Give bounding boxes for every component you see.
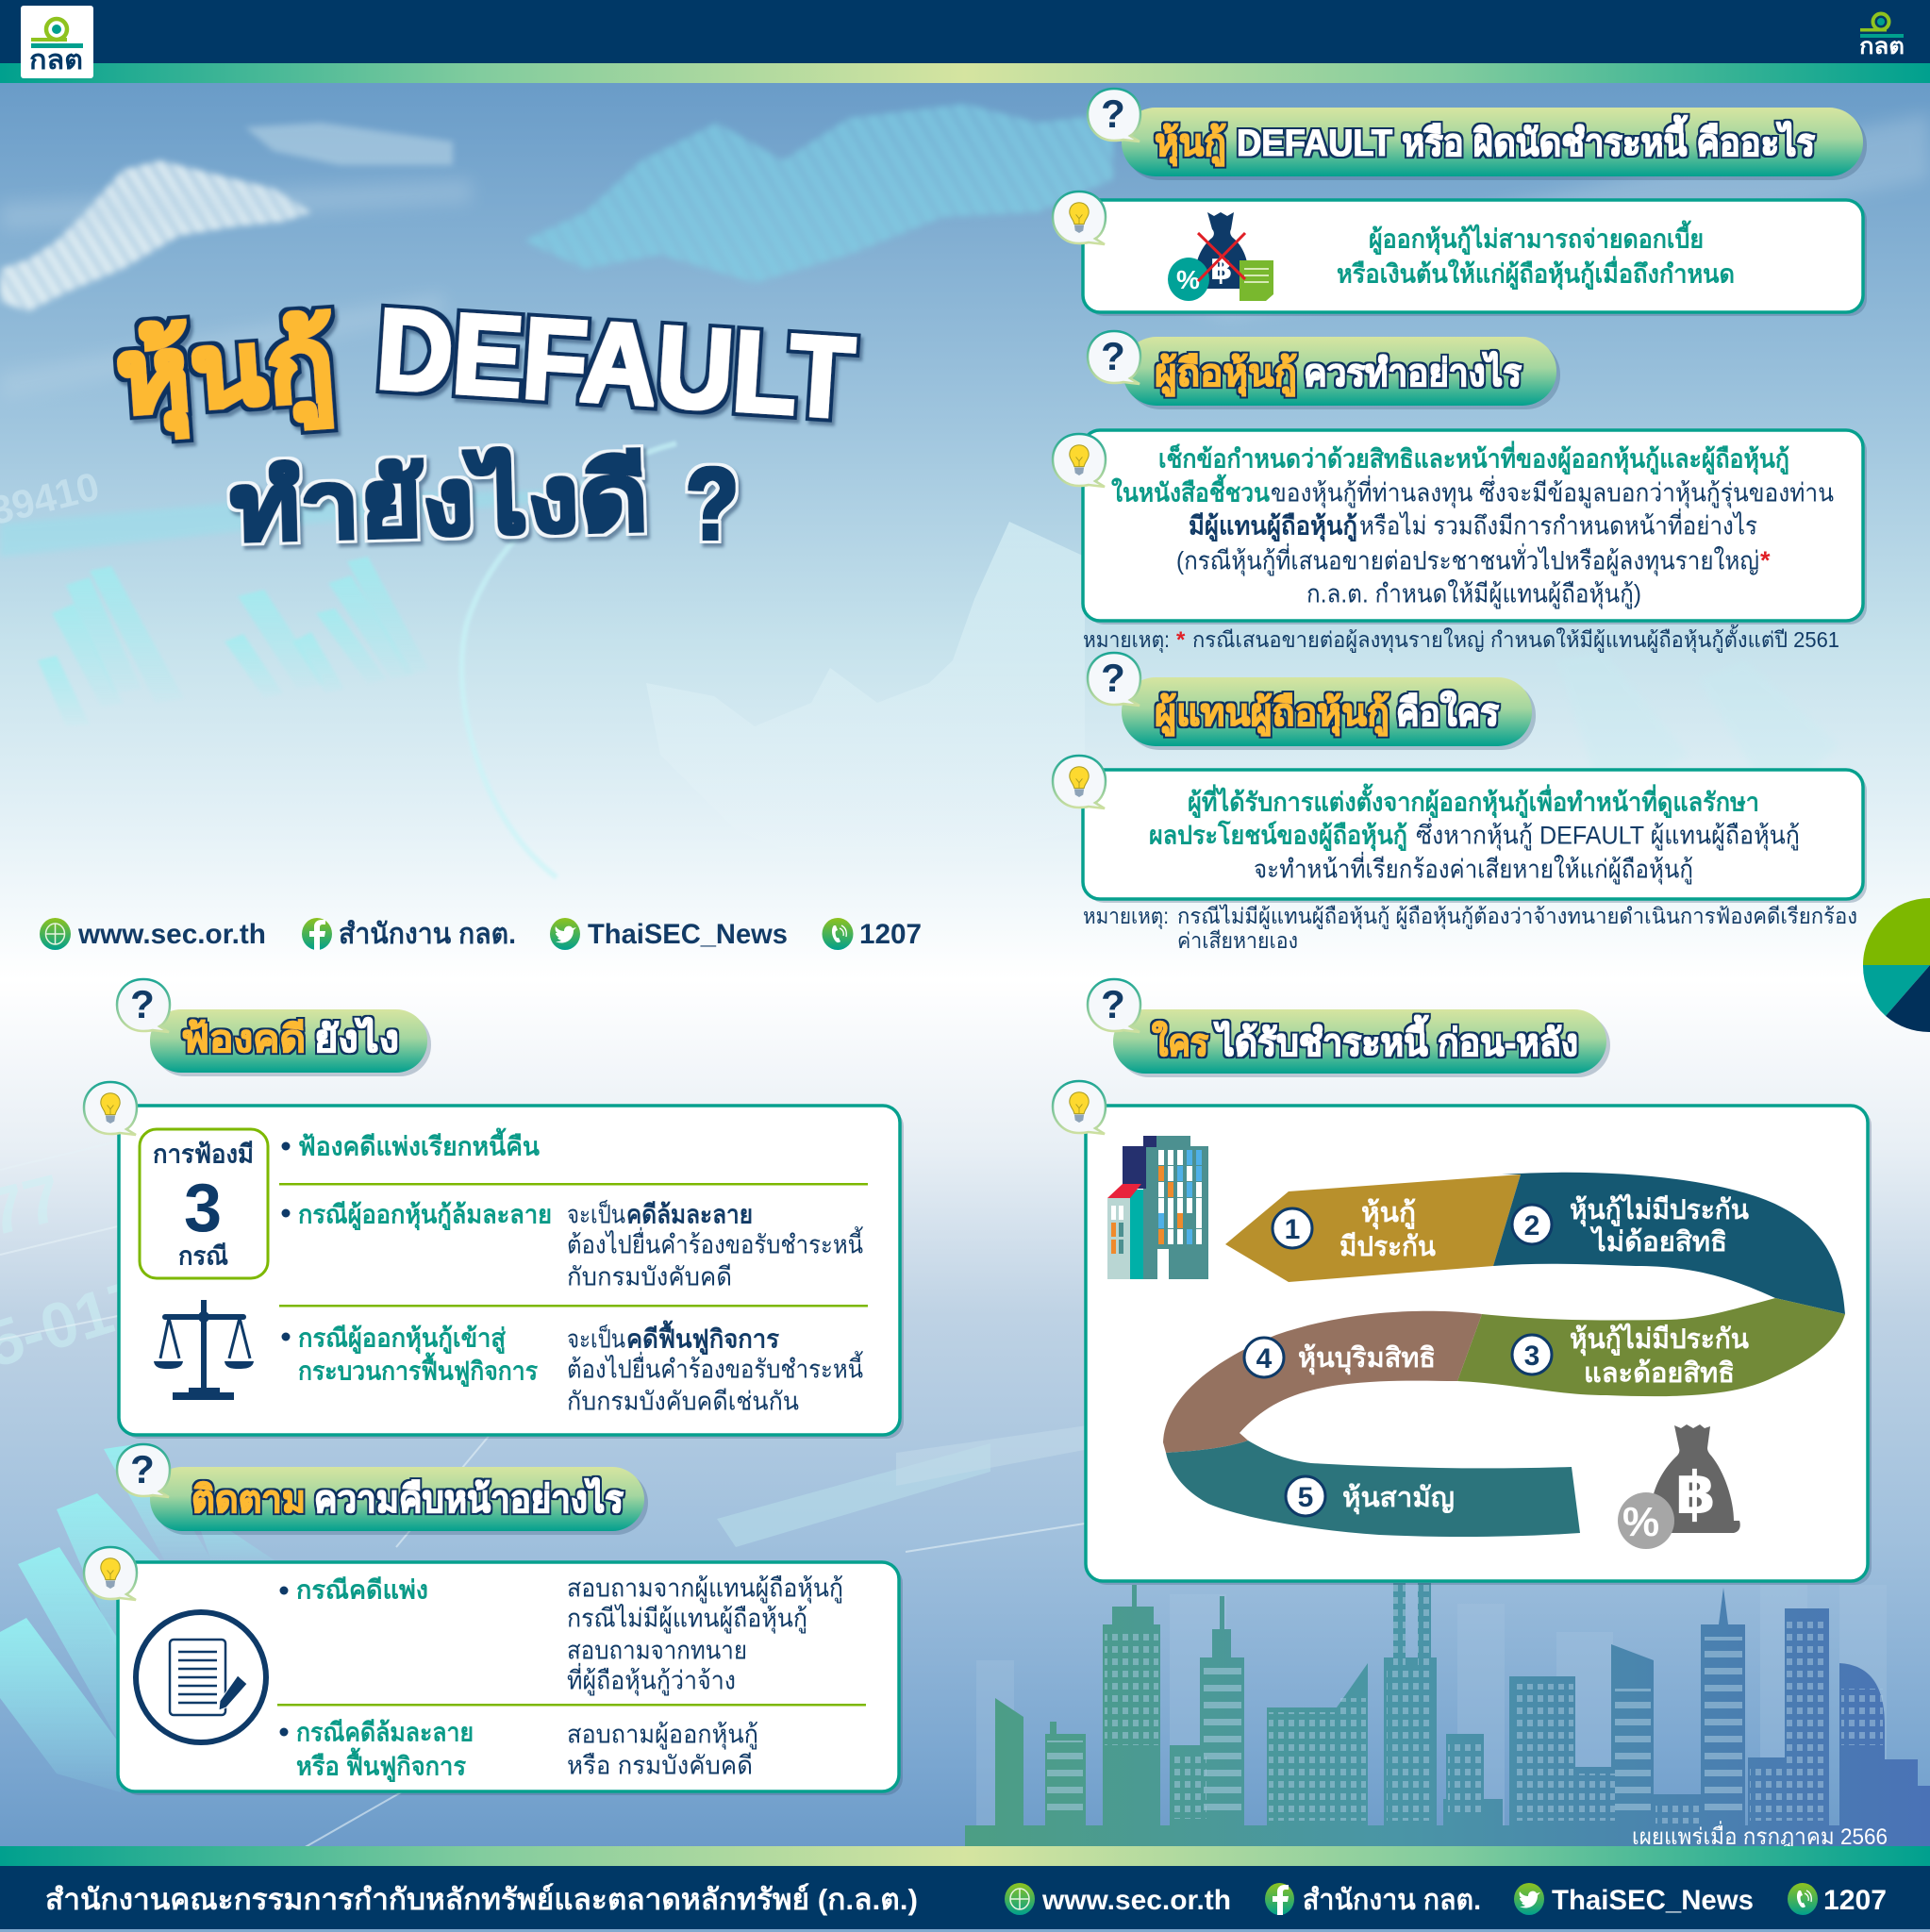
icon: question bubble: ? [1101,92,1125,136]
panel: check prospectus: มีผู้แทนผู้ถือหุ้นกู้ [1189,511,1357,541]
title: ทำยังไงดี [229,443,649,559]
case: bankruptcy or rehabilitation [279,1719,758,1783]
number 2 [1512,1205,1552,1244]
panel: representative [1053,756,1867,903]
footer bar [0,1846,1930,1932]
panel: check prospectus: ในหนังสือชี้ชวน [1111,474,1270,508]
panel: follow up [84,1547,903,1795]
case: civil: กรณีไม่มีผู้แทนผู้ถือหุ้นกู้ [567,1604,807,1634]
note: no representative: หมายเหตุ: [1083,904,1169,929]
number 4 [1244,1338,1284,1377]
icon: question bubble [1088,979,1140,1032]
ribbon segment 4 [1163,1311,1482,1453]
heading: who is the representative: คือใคร [1396,691,1499,734]
heading: follow progress: ความคืบหน้าอย่างไร [314,1477,624,1521]
logo left: กลต [29,45,83,75]
case: bankruptcy or rehabilitation: หรือ กรมบังคับคดี [567,1751,753,1779]
icon: bulb bubble [1053,756,1106,808]
panel: representative: ผลประโยชน์ของผู้ถือหุ้นกู้ [1149,819,1407,851]
panel: check prospectus: ก.ล.ต. กำหนดให้มีผู้แทนผู้ถือหุ้นกู้) [1306,579,1641,609]
icon: grey money bag [1618,1424,1740,1549]
number 3: 3 [1524,1341,1539,1372]
icon: bulb bubble [1053,434,1106,487]
logo left [21,6,93,78]
case 2: bankruptcy [281,1198,863,1291]
icon: money bag crossed: ฿ [1210,251,1233,287]
panel: definition: ผู้ออกหุ้นกู้ไม่สามารถจ่ายดอกเบี้ย [1369,219,1704,255]
icon: money bag crossed: % [1176,265,1200,294]
icon: question bubble [117,979,170,1032]
ribbon segment 2: ไม่ด้อยสิทธิ [1589,1225,1727,1257]
top bar [0,0,1930,83]
icon: question bubble: ? [1101,334,1125,378]
icon: facebook [302,918,332,950]
panel: check prospectus: * [1760,546,1771,575]
case: bankruptcy or rehabilitation: กรณีคดีล้มละลาย [296,1719,474,1747]
case: civil: ที่ผู้ถือหุ้นกู้ว่าจ้าง [567,1662,736,1696]
icon: question bubble [117,1444,170,1497]
number 1: 1 [1285,1214,1300,1245]
icon: question bubble: ? [130,982,155,1026]
heading: what is default: หุ้นกู้ [1155,123,1226,167]
panel: representative: ซึ่งหากหุ้นกู้ DEFAULT ผู้แทนผู้ถือหุ้นกู้ [1416,817,1800,851]
heading: what is default: DEFAULT หรือ ผิดนัดชำระหนี้ คืออะไร [1237,115,1815,164]
icon: grey money bag: % [1622,1499,1659,1545]
case: bankruptcy or rehabilitation: สอบถามผู้ออกหุ้นกู้ [567,1721,758,1751]
icon: question bubble [1088,331,1140,384]
case 2: bankruptcy: จะเป็น [567,1198,625,1228]
ribbon segment 2 [1493,1173,1845,1314]
case 2: bankruptcy: กับกรมบังคับคดี [567,1262,732,1291]
icon: question bubble [1088,89,1140,142]
icon: globe [40,918,71,950]
heading: what is default [1088,89,1867,180]
panel: definition [1053,192,1867,316]
ribbon segment 5 [1166,1441,1580,1537]
case: civil: สอบถามจากทนาย [567,1636,747,1664]
social row: สำนักงาน กลต. [339,919,516,950]
logo right [1859,13,1905,59]
pie corner graphic [1863,898,1930,1032]
title: ? [686,446,739,560]
note: no representative [1083,904,1857,953]
callout: three cases [140,1129,268,1278]
title: DEFAULT [374,284,857,442]
title [112,284,857,560]
heading: what should holders do: ผู้ถือหุ้นกู้ [1155,353,1297,397]
panel: check prospectus: เช็กข้อกำหนดว่าด้วยสิทธิและหน้าที่ของผู้ออกหุ้นกู้และผู้ถือหุ้นกู้ [1158,440,1789,475]
ribbon segment 3 [1457,1298,1845,1396]
heading: what should holders do [1088,331,1560,409]
panel: lawsuit cases [84,1082,904,1439]
number 4: 4 [1256,1343,1273,1374]
case: civil: กรณีคดีแพ่ง [296,1575,428,1604]
ribbon segment 1: หุ้นกู้ [1361,1198,1416,1229]
number 2: 2 [1524,1210,1539,1241]
heading: how to sue: ฟ้องคดี [181,1019,306,1060]
panel: definition: หรือเงินต้นให้แก่ผู้ถือหุ้นกู้เมื่อถึงกำหนด [1337,255,1735,291]
note: no representative: ค่าเสียหายเอง [1177,928,1298,953]
footer icon: facebook [1265,1883,1294,1915]
city skyline [965,1583,1930,1846]
ribbon segment 5: หุ้นสามัญ [1342,1483,1455,1514]
icon: grey money bag: ฿ [1675,1461,1716,1526]
icon: question bubble: ? [1101,656,1125,700]
ribbon segment 1: มีประกัน [1339,1232,1436,1262]
case 1: civil: ฟ้องคดีแพ่งเรียกหนี้คืน [298,1126,541,1160]
callout: three cases: การฟ้องมี [153,1140,254,1168]
social row: 1207 [859,919,922,950]
number 5 [1286,1476,1325,1516]
footer bar: www.sec.or.th [1041,1885,1231,1916]
heading: follow progress [117,1444,648,1535]
social row [40,918,922,950]
icon: twitter [550,918,580,950]
case 3: rehabilitation: คดีฟื้นฟูกิจการ [626,1319,779,1355]
case 3: rehabilitation: ต้องไปยื่นคำร้องขอรับชำระหนี้ [567,1351,863,1383]
ribbon segment 3: และด้อยสิทธิ [1584,1358,1735,1389]
heading: how to sue [117,979,431,1076]
title: หุ้นกู้ [112,305,339,442]
icon: money bag crossed [1168,212,1273,301]
callout: three cases: กรณี [178,1241,228,1270]
heading: who gets paid first [1088,979,1610,1077]
icon: bulb bubble [84,1082,137,1135]
footer bar: สำนักงาน กลต. [1303,1885,1481,1916]
heading: who is the representative [1088,653,1536,750]
decorative faint figures left [0,1160,156,1381]
heading: how to sue: ยังไง [314,1017,399,1060]
footer icon: phone [1788,1883,1818,1915]
note: large investors: * [1176,627,1186,653]
footer bar: ThaiSEC_News [1552,1885,1754,1916]
number 1 [1273,1208,1312,1248]
ribbon segment 3: หุ้นกู้ไม่มีประกัน [1570,1323,1749,1356]
case 3: rehabilitation: กับกรมบังคับคดีเช่นกัน [567,1387,799,1415]
number 3 [1512,1335,1552,1374]
note: large investors: หมายเหตุ: [1083,627,1170,653]
icon: bulb bubble [1053,192,1106,244]
icon: scales [154,1300,254,1400]
case: civil: สอบถามจากผู้แทนผู้ถือหุ้นกู้ [567,1574,843,1604]
icon: bulb bubble [1053,1081,1106,1134]
panel: repayment order [1053,1081,1872,1585]
social row: ThaiSEC_News [588,919,788,950]
panel: check prospectus: หรือไม่ รวมถึงมีการกำหนดหน้าที่อย่างไร [1359,508,1757,540]
case 2: bankruptcy: ต้องไปยื่นคำร้องขอรับชำระหนี้ [567,1226,863,1258]
case: bankruptcy or rehabilitation: หรือ ฟื้นฟูกิจการ [296,1747,466,1783]
icon: question bubble: ? [130,1447,155,1491]
footer icon: globe [1005,1883,1035,1915]
ribbon segment 4: หุ้นบุริมสิทธิ [1298,1343,1436,1374]
heading: who gets paid first: ได้รับชำระหนี้ ก่อน-หลัง [1213,1015,1578,1064]
publish date: เผยแพร่เมื่อ กรกฎาคม 2566 [1632,1821,1888,1850]
icon: building [1107,1136,1208,1279]
footer icon: twitter [1514,1883,1544,1915]
icon: document with pen [136,1612,266,1742]
note: no representative: กรณีไม่มีผู้แทนผู้ถือหุ้นกู้ ผู้ถือหุ้นกู้ต้องว่าจ้างทนายดำเนินการฟ้องคดีเรียกร้อง [1177,904,1857,929]
panel: representative: ผู้ที่ได้รับการแต่งตั้งจากผู้ออกหุ้นกู้เพื่อทำหน้าที่ดูแลรักษา [1188,783,1759,819]
callout: three cases: 3 [184,1171,222,1246]
logo right: กลต [1859,34,1905,59]
case 2: bankruptcy: กรณีผู้ออกหุ้นกู้ล้มละลาย [298,1200,552,1230]
heading: who gets paid first: ใคร [1152,1021,1208,1064]
case 2: bankruptcy: คดีล้มละลาย [626,1200,753,1228]
panel: check prospectus: (กรณีหุ้นกู้ที่เสนอขายต่อประชาชนทั่วไปหรือผู้ลงทุนรายใหญ่ [1176,543,1759,577]
case 3: rehabilitation: กรณีผู้ออกหุ้นกู้เข้าสู่ [298,1324,506,1355]
ribbon segment 2: หุ้นกู้ไม่มีประกัน [1570,1193,1749,1226]
panel: representative: จะทำหน้าที่เรียกร้องค่าเสียหายให้แก่ผู้ถือหุ้นกู้ [1254,851,1693,885]
icon: question bubble: ? [1101,982,1125,1026]
ribbon segment 1 [1225,1174,1521,1282]
heading: follow progress: ติดตาม [191,1479,306,1521]
heading: who is the representative: ผู้แทนผู้ถือหุ้นกู้ [1155,692,1389,737]
icon: phone [823,918,853,950]
footer organisation name: สำนักงานคณะกรรมการกำกับหลักทรัพย์และตลาดหลักทรัพย์ (ก.ล.ต.) [45,1883,918,1916]
footer bar: 1207 [1823,1885,1887,1916]
case 3: rehabilitation [281,1319,863,1415]
case 3: rehabilitation: จะเป็น [567,1323,625,1353]
icon: question bubble [1088,653,1140,706]
panel: check prospectus: ของหุ้นกู้ที่ท่านลงทุน ซึ่งจะมีข้อมูลบอกว่าหุ้นกู้รุ่นของท่าน [1271,475,1834,509]
number 5: 5 [1298,1482,1313,1513]
case 3: rehabilitation: กระบวนการฟื้นฟูกิจการ [298,1351,538,1387]
icon: bulb bubble [84,1547,137,1600]
note: large investors: กรณีเสนอขายต่อผู้ลงทุนรายใหญ่ กำหนดให้มีผู้แทนผู้ถือหุ้นกู้ตั้งแต่ปี 2561 [1192,625,1839,653]
panel: check prospectus [1053,430,1867,625]
heading: what should holders do: ควรทำอย่างไร [1304,351,1522,394]
social row: www.sec.or.th [77,919,266,950]
case: civil [279,1574,843,1696]
